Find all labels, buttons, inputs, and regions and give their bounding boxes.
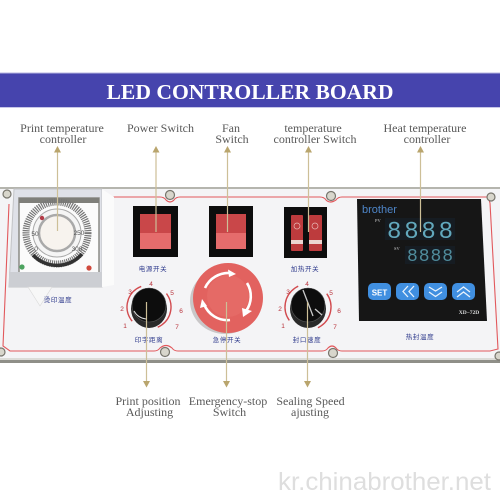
chinese panel captions: 封口速度: [293, 335, 321, 344]
panel: heat temperature controller: brother: [362, 204, 397, 216]
label: heat temperature controller: Heat temperature: [384, 121, 466, 135]
label: temperature controller switch: temperature: [284, 121, 342, 135]
panel: heat temperature controller: SET: [372, 288, 387, 298]
icon: print position knob: 3: [128, 289, 132, 296]
icon: print position knob: [118, 276, 183, 338]
label: sealing speed ajusting: ajusting: [291, 405, 329, 419]
icon: sealing speed knob: 5: [329, 290, 333, 297]
icon: power rocker switch: [133, 206, 178, 257]
label: print position adjusting: Print position: [115, 394, 181, 408]
label: emergency-stop switch: Emergency-stop: [189, 394, 267, 408]
arrow: emergency stop: [223, 302, 230, 388]
arrow: power switch: [152, 146, 160, 232]
chinese panel captions: 加热开关: [291, 264, 319, 273]
icon: print position knob: 4: [149, 281, 153, 288]
icon: print position knob: 5: [170, 290, 174, 297]
icon: print temperature dial: [9, 189, 114, 306]
title banner: [0, 72, 500, 108]
icon: print temperature dial: 250: [74, 230, 85, 237]
label: print temperature controller: Print temperature: [20, 121, 104, 135]
icon: sealing speed knob: 1: [281, 323, 285, 330]
arrow: sealing speed: [304, 302, 311, 388]
icon: print position knob: 2: [120, 306, 124, 313]
chinese panel captions: 热封温度: [406, 332, 434, 341]
chinese panel captions: 急停开关: [213, 335, 241, 344]
icon: print temperature dial: 300: [72, 246, 83, 253]
chinese panel captions: 电源开关: [139, 264, 167, 273]
chinese panel captions: 烫印温度: [44, 295, 72, 304]
label: print temperature controller: controller: [40, 132, 86, 146]
icon: print position knob: 7: [175, 324, 179, 331]
icon: screws: [0, 190, 500, 360]
chinese panel captions: 印字距离: [135, 335, 163, 344]
panel: heat temperature controller: 8888: [387, 219, 453, 246]
panel: heat temperature controller: [357, 199, 487, 321]
icon: print temperature dial: 0: [34, 246, 38, 253]
icon: print temperature dial: 50: [31, 231, 39, 238]
title banner: LED CONTROLLER BOARD: [106, 80, 394, 104]
arrow: print position: [143, 302, 150, 388]
icon: sealing speed knob: 6: [337, 308, 341, 315]
panel: heat temperature controller: XD−72D: [459, 310, 479, 316]
arrow: heat temperature: [417, 146, 424, 232]
icon: sealing speed knob: [276, 275, 341, 339]
panel: heat temperature controller: PV: [375, 218, 382, 223]
arrow: heater switch: [305, 146, 312, 232]
chinese panel captions: [44, 264, 434, 344]
label: temperature controller switch: controller Switch: [274, 132, 356, 146]
arrow: fan switch: [224, 146, 231, 232]
arrow: print temperature: [54, 146, 61, 231]
icon: sealing speed knob: 4: [305, 281, 309, 288]
icon: sealing speed knob: 3: [286, 289, 290, 296]
label: heat temperature controller: controller: [404, 132, 450, 146]
watermark: kr.chinabrother.net: [278, 468, 491, 496]
label: sealing speed ajusting: Sealing Speed: [276, 394, 345, 408]
label: print position adjusting: Adjusting: [126, 405, 173, 419]
label: fan switch: Fan: [222, 121, 240, 135]
icon: print position knob: 1: [123, 323, 127, 330]
label: fan switch: Switch: [215, 132, 249, 146]
panel: heat temperature controller: SV: [394, 246, 401, 251]
icon: emergency stop button: [190, 263, 263, 334]
panel: heat temperature controller: 8888: [407, 247, 453, 267]
icon: fan rocker switch: [209, 206, 253, 257]
panel: controller board: [0, 187, 500, 363]
icon: sealing speed knob: 7: [333, 324, 337, 331]
icon: print position knob: 6: [179, 308, 183, 315]
icon: heater twin switch: [284, 207, 327, 258]
label: emergency-stop switch: Switch: [213, 405, 246, 419]
label: power switch: Power Switch: [127, 121, 194, 135]
icon: sealing speed knob: 2: [278, 306, 282, 313]
